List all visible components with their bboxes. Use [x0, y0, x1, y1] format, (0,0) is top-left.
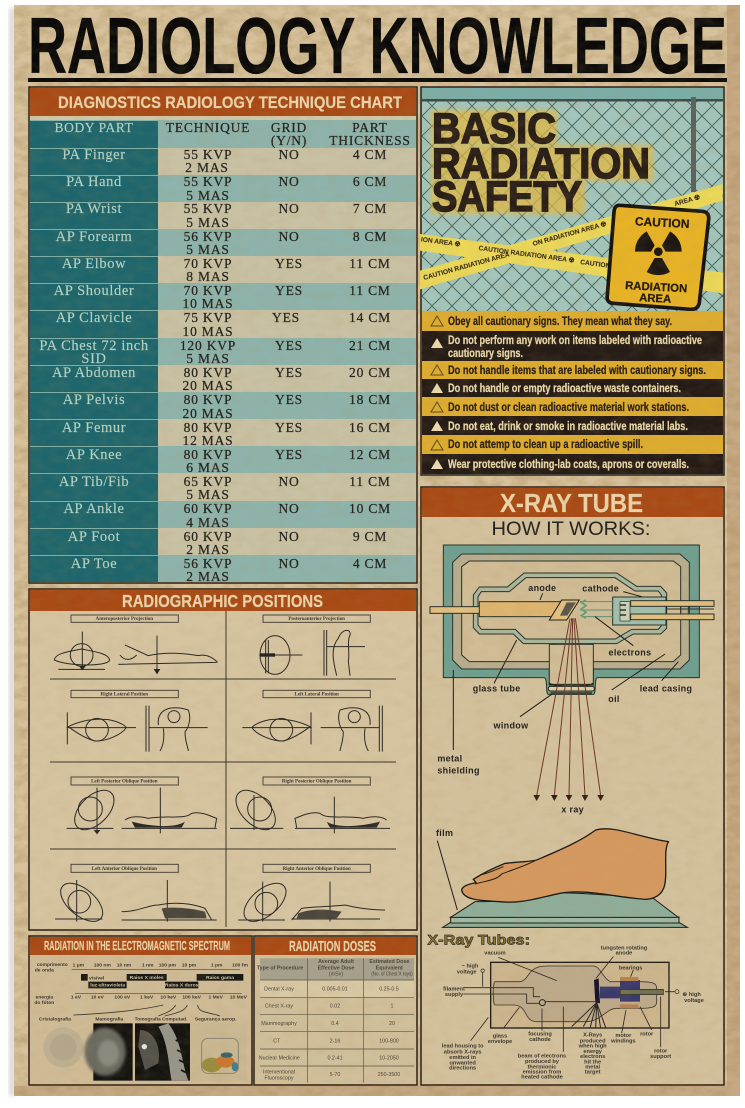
foot on film diagram: x ray	[561, 805, 584, 815]
table rows: AP Tib/Fib	[59, 474, 129, 490]
table rows: 10 MAS	[183, 324, 233, 339]
tube labels: support	[650, 1054, 671, 1060]
table rows: 8 CM	[353, 229, 387, 244]
table rows: AP Pelvis	[63, 392, 125, 408]
tube labels: − high	[462, 963, 479, 969]
spectrum chart: 1 keV	[140, 995, 154, 1001]
tube labels: emitted in	[449, 1055, 477, 1061]
safety heading: RADIATION	[432, 140, 650, 188]
panel: radiation doses	[254, 936, 417, 1085]
table header row: BODY PART	[55, 120, 134, 135]
doses table: CT	[273, 1038, 281, 1044]
safety rules list: Do not attemp to clean up a radioactive spill.	[448, 439, 643, 451]
panel: radiographic positions	[29, 589, 417, 930]
table rows: NO	[278, 201, 300, 216]
spectrum chart: Cristalografia	[39, 1017, 71, 1023]
tube labels: anode	[616, 951, 632, 957]
table rows: 5 MAS	[186, 188, 230, 203]
doses table: Effective Dose	[318, 965, 354, 971]
position: right anterior oblique: Right Anterior Oblique Position	[283, 867, 351, 872]
table rows: 4 CM	[353, 556, 387, 571]
diagram labels: oil	[608, 694, 620, 704]
caution tape: ON RADIATION AREA ☢	[532, 220, 607, 248]
table rows: 5 MAS	[186, 351, 230, 366]
table rows: AP Toe	[71, 556, 117, 572]
position: anteroposterior projection: Anteroposterior Projection	[96, 617, 153, 622]
table rows: AP Shoulder	[54, 283, 134, 299]
doses table: 5-70	[330, 1072, 340, 1078]
tube labels: produced	[580, 1038, 606, 1044]
position: left lateral: Left Lateral Position	[295, 692, 339, 697]
tube labels: ⊕ high	[683, 992, 701, 998]
tube labels: when high	[578, 1044, 607, 1050]
doses table: Interventional	[263, 1069, 295, 1075]
position: posteroanterior projection: Posteroanterior Projection	[288, 617, 345, 622]
doses table: 0.005-0.01	[322, 986, 348, 992]
position: right lateral: Right Lateral Position	[101, 692, 148, 697]
tube labels: glass	[493, 1033, 507, 1039]
position: right anterior oblique	[237, 864, 385, 929]
table rows: 75 KVP	[184, 310, 232, 325]
spectrum chart: 10 pm	[182, 963, 197, 969]
positions heading	[30, 590, 416, 611]
foot on film diagram	[436, 805, 687, 927]
tube labels: focusing	[528, 1031, 552, 1037]
caution tape	[420, 184, 723, 293]
table rows: 11 CM	[349, 256, 391, 271]
diagram labels: lead casing	[640, 684, 692, 694]
spectrum chart: 1 eV	[71, 995, 82, 1001]
spectrum chart: 100 nm	[94, 963, 111, 969]
tube labels: energy	[583, 1049, 603, 1055]
table rows: 8 MAS	[186, 269, 230, 284]
position: left anterior oblique: Left Anterior Oblique Position	[92, 867, 157, 872]
mammography image	[84, 1023, 133, 1081]
table header row	[55, 120, 411, 148]
table header row: (Y/N)	[271, 133, 307, 148]
safety rules list: Do not handle or empty radioactive waste containers.	[448, 383, 681, 395]
safety rules list: Obey all cautionary signs. They mean what they say.	[448, 316, 672, 328]
doses table: Fluoroscopy	[264, 1076, 294, 1082]
spectrum chart: 10 keV	[160, 995, 177, 1001]
safety rules list: Wear protective clothing-lab coats, aprons or coveralls.	[448, 459, 689, 471]
tube labels: metal	[585, 1064, 600, 1070]
icon: radiation trefoil	[635, 231, 682, 275]
table rows: YES	[275, 420, 303, 435]
safety rules list	[422, 311, 723, 474]
spectrum heading: RADIATION IN THE ELECTROMAGNETIC SPECTRUM	[44, 938, 230, 953]
table rows: NO	[278, 174, 300, 189]
spectrum chart: luz ultravioleta	[90, 983, 125, 989]
table rows: 10 MAS	[183, 296, 233, 311]
table rows: 6 MAS	[186, 460, 230, 475]
table rows: PA Wrist	[66, 201, 122, 217]
table stripes	[30, 120, 416, 582]
caution tape: CAUTION R	[580, 259, 618, 271]
tube labels: produced by	[525, 1059, 560, 1065]
spectrum chart: 100 pm	[159, 963, 176, 969]
table rows: NO	[278, 474, 300, 489]
table rows: 2 MAS	[186, 542, 230, 557]
diagram labels: electrons	[609, 647, 651, 657]
tube labels: voltage	[684, 998, 704, 1004]
callout lines	[453, 592, 678, 750]
table rows: 80 KVP	[184, 447, 232, 462]
position: right posterior oblique: Right Posterior Oblique Position	[282, 780, 352, 785]
table rows: AP Abdomen	[52, 365, 136, 381]
spectrum chart: 10 nm	[117, 963, 132, 969]
table rows: 11 CM	[349, 474, 391, 489]
tube labels: X-Rays	[583, 1033, 602, 1039]
table rows: YES	[272, 310, 300, 325]
table rows: 4 MAS	[186, 515, 230, 530]
doses table: Mammography	[261, 1021, 297, 1027]
tube labels: vacuum	[484, 951, 506, 957]
safety rules list: Do not dust or clean radioactive material work stations.	[448, 402, 689, 414]
spectrum chart: 100 eV	[114, 995, 131, 1001]
diagram labels: anode	[528, 583, 556, 593]
position: anteroposterior projection	[54, 615, 218, 674]
doses table: (No. of Chest X rays)	[371, 971, 413, 977]
table rows: 5 MAS	[186, 215, 230, 230]
caution sign: CAUTION	[635, 214, 690, 231]
doses heading	[255, 937, 416, 955]
table rows: AP Forearm	[56, 229, 132, 245]
tube labels: rotor	[654, 1049, 668, 1055]
spectrum chart: Mamografia	[95, 1017, 124, 1023]
tube labels: bearings	[619, 965, 642, 971]
table header row: THICKNESS	[329, 133, 411, 148]
tube labels: hit the	[584, 1059, 601, 1065]
position: right posterior oblique	[229, 777, 390, 837]
table rows: PA Chest 72 inch	[39, 338, 149, 354]
diagram labels: cathode	[582, 584, 619, 594]
tube labels: lead housing to	[442, 1043, 484, 1049]
doses table: 1	[391, 1004, 394, 1010]
tube labels	[442, 945, 704, 1080]
table rows: 120 KVP	[180, 338, 236, 353]
doses table: 0.02	[330, 1004, 340, 1010]
doses table: 2-16	[330, 1038, 340, 1044]
table rows: YES	[275, 447, 303, 462]
table rows: 7 CM	[353, 201, 387, 216]
crystallography image	[43, 1027, 83, 1067]
tube labels: rotor	[640, 1032, 654, 1038]
caution sign: RADIATION	[625, 280, 687, 295]
table rows: 70 KVP	[184, 283, 232, 298]
tube labels: filament	[443, 986, 465, 992]
table rows: 56 KVP	[184, 556, 232, 571]
diagram labels: metal	[437, 754, 462, 764]
tube labels: unwanted	[449, 1060, 476, 1066]
table rows: NO	[278, 556, 300, 571]
doses table: Estimated Dose	[369, 959, 409, 965]
diagram labels: window	[493, 720, 528, 730]
table rows	[39, 147, 391, 584]
position: left posterior oblique	[67, 777, 217, 837]
doses table: 0.4	[331, 1021, 339, 1027]
table header row: PART	[352, 120, 388, 135]
baggage scan image	[191, 1023, 246, 1081]
table rows: PA Hand	[66, 174, 122, 190]
table rows: AP Foot	[68, 529, 120, 545]
doses table: 10-2050	[379, 1056, 399, 1062]
table rows: 56 KVP	[184, 229, 232, 244]
position: left anterior oblique	[54, 864, 217, 929]
spectrum chart: comprimento	[37, 962, 68, 968]
table rows: YES	[275, 392, 303, 407]
spectrum chart: 100 keV	[182, 995, 202, 1001]
table rows: YES	[275, 338, 303, 353]
table rows: 70 KVP	[184, 256, 232, 271]
spectrum heading	[30, 937, 251, 955]
table rows: 18 CM	[349, 392, 391, 407]
doses table: 20	[389, 1021, 395, 1027]
table rows: 20 MAS	[183, 378, 233, 393]
CT scan image	[135, 1023, 190, 1081]
tube labels: absorb X-rays	[444, 1049, 482, 1055]
table rows: 20 CM	[349, 365, 391, 380]
table rows: AP Ankle	[63, 501, 125, 517]
caution tape: ION AREA ☢	[420, 235, 461, 249]
tube labels: windings	[610, 1039, 636, 1045]
x-ray tube heading: X-RAY TUBE	[500, 488, 643, 518]
table rows: 2 MAS	[185, 160, 229, 175]
table rows: AP Knee	[66, 447, 122, 463]
table rows: AP Clavicle	[56, 310, 132, 326]
doses table: 250-3500	[378, 1072, 400, 1078]
caution tape: CAUTION RADIATION AREA ☢	[478, 244, 575, 265]
table rows: NO	[278, 501, 300, 516]
table rows: 4 CM	[353, 147, 387, 162]
spectrum chart: 1 pm	[211, 963, 223, 969]
spectrum chart	[34, 962, 248, 1081]
table rows: 9 CM	[353, 529, 387, 544]
spectrum chart: 10 MeV	[230, 995, 248, 1001]
position: right lateral	[67, 690, 208, 752]
doses heading: RADIATION DOSES	[289, 938, 376, 955]
safety heading: SAFETY	[432, 173, 582, 221]
position: left lateral	[242, 690, 382, 752]
table rows: YES	[275, 283, 303, 298]
safety rules list: Do not eat, drink or smoke in radioactive material labs.	[448, 421, 688, 433]
table rows: 60 KVP	[184, 529, 232, 544]
doses table: Equivalent	[376, 965, 403, 971]
spectrum chart: energia	[35, 995, 53, 1001]
panel: radiation in the electromagnetic spectrum	[29, 936, 252, 1085]
table header row: TECHNIQUE	[166, 120, 250, 135]
table header row: GRID	[271, 120, 307, 135]
doses table: Chest X-ray	[265, 1004, 293, 1010]
doses table: 100-800	[379, 1038, 399, 1044]
position: posteroanterior projection	[260, 615, 370, 676]
safety heading	[431, 105, 653, 221]
table rows: YES	[275, 256, 303, 271]
spectrum chart: 10 eV	[91, 995, 105, 1001]
table rows: 14 CM	[349, 310, 391, 325]
tube labels: supply	[445, 992, 464, 998]
x-ray beams	[537, 618, 601, 796]
rotating anode tube diagram	[442, 945, 704, 1080]
table rows: 60 KVP	[184, 501, 232, 516]
table rows: 80 KVP	[184, 420, 232, 435]
tube labels: motor	[615, 1033, 632, 1039]
x-ray tube heading	[422, 488, 723, 518]
table rows: 10 CM	[349, 501, 391, 516]
panel: x-ray tube	[421, 487, 724, 1085]
spectrum chart: 1 MeV	[208, 995, 224, 1001]
doses table: 0.25-0.5	[379, 986, 399, 992]
tube labels: electrons	[580, 1054, 605, 1060]
caution tape: CAUTION RADIATION AREA	[423, 251, 511, 282]
spectrum chart: Raios X duros	[165, 983, 199, 989]
spectrum chart: visível	[89, 975, 105, 981]
spectrum chart: do fóton	[34, 1000, 54, 1006]
tube labels: tungsten rotating	[601, 945, 648, 951]
spectrum chart: Segurança aerop.	[195, 1017, 237, 1023]
table rows: NO	[278, 229, 300, 244]
doses table: 0.2-41	[327, 1056, 343, 1062]
doses table: Dental X-ray	[264, 986, 294, 992]
position: left posterior oblique: Left Posterior Oblique Position	[91, 780, 158, 785]
spectrum chart: Raios X moles	[130, 975, 164, 981]
doses table: (mSv)	[329, 971, 343, 977]
diagram labels: glass tube	[473, 684, 521, 694]
table rows: NO	[278, 147, 300, 162]
table rows: 12 CM	[349, 447, 391, 462]
tube labels: thermionic	[528, 1065, 556, 1071]
spectrum chart: 1 µm	[73, 963, 85, 969]
table rows: 16 CM	[349, 420, 391, 435]
doses table: Average Adult	[318, 959, 354, 965]
caution sign	[607, 205, 709, 309]
panel: basic radiation safety	[420, 87, 724, 475]
chain-link fence illustration	[422, 88, 723, 311]
table rows: 2 MAS	[186, 569, 230, 584]
table rows: 21 CM	[349, 338, 391, 353]
doses table	[257, 958, 414, 1083]
table rows: 11 CM	[349, 283, 391, 298]
table rows: 20 MAS	[183, 406, 233, 421]
table rows: 6 CM	[353, 174, 387, 189]
tube cross-section diagram	[430, 545, 714, 801]
tube labels: envelope	[488, 1039, 512, 1045]
doses table: Type of Procedure	[257, 966, 303, 972]
panel: technique chart	[29, 87, 417, 584]
diagram labels: shielding	[437, 765, 480, 775]
table rows: 12 MAS	[183, 433, 233, 448]
tube labels: emission from	[523, 1069, 561, 1075]
spectrum chart: de onda	[35, 967, 54, 973]
table rows: PA Finger	[62, 147, 126, 163]
table rows: AP Femur	[62, 420, 126, 436]
foot on film diagram: film	[436, 828, 453, 838]
table rows: 80 KVP	[184, 365, 232, 380]
tube labels: heated cathode	[521, 1074, 563, 1080]
safety heading: BASIC	[432, 105, 556, 153]
table rows: 5 MAS	[186, 242, 230, 257]
caution sign: AREA	[639, 292, 672, 306]
table rows: 5 MAS	[186, 487, 230, 502]
spectrum chart: Tomografia Computad.	[135, 1017, 188, 1023]
chart heading: DIAGNOSTICS RADIOLOGY TECHNIQUE CHART	[58, 93, 403, 112]
x-ray tubes heading: X-Ray Tubes:	[427, 932, 530, 948]
how it works subheading: HOW IT WORKS:	[492, 518, 650, 540]
spectrum chart: 1 nm	[142, 963, 154, 969]
doses table: Nuclear Medicine	[259, 1056, 300, 1062]
diagram labels	[437, 583, 692, 775]
positions heading: RADIOGRAPHIC POSITIONS	[122, 591, 323, 611]
table rows: 55 KVP	[184, 201, 232, 216]
tube labels: target	[585, 1069, 601, 1075]
table rows: NO	[278, 529, 300, 544]
table rows: 80 KVP	[184, 392, 232, 407]
chart heading	[30, 88, 416, 116]
table rows: 55 KVP	[184, 174, 232, 189]
spectrum chart: Raios gama	[206, 975, 234, 981]
caution tape: AREA ☢	[673, 193, 701, 208]
tube labels: beam of electrons	[518, 1053, 566, 1059]
table rows: 65 KVP	[184, 474, 232, 489]
table rows: AP Elbow	[62, 256, 126, 272]
table rows: SID	[81, 351, 107, 367]
tube labels: voltage	[457, 969, 477, 975]
tube labels: directions	[449, 1065, 476, 1071]
table rows: YES	[275, 365, 303, 380]
spectrum chart: 100 fm	[232, 963, 248, 969]
safety rules list: cautionary signs.	[448, 348, 523, 360]
table rows: 55 KVP	[184, 147, 232, 162]
tube labels: cathode	[529, 1037, 551, 1043]
